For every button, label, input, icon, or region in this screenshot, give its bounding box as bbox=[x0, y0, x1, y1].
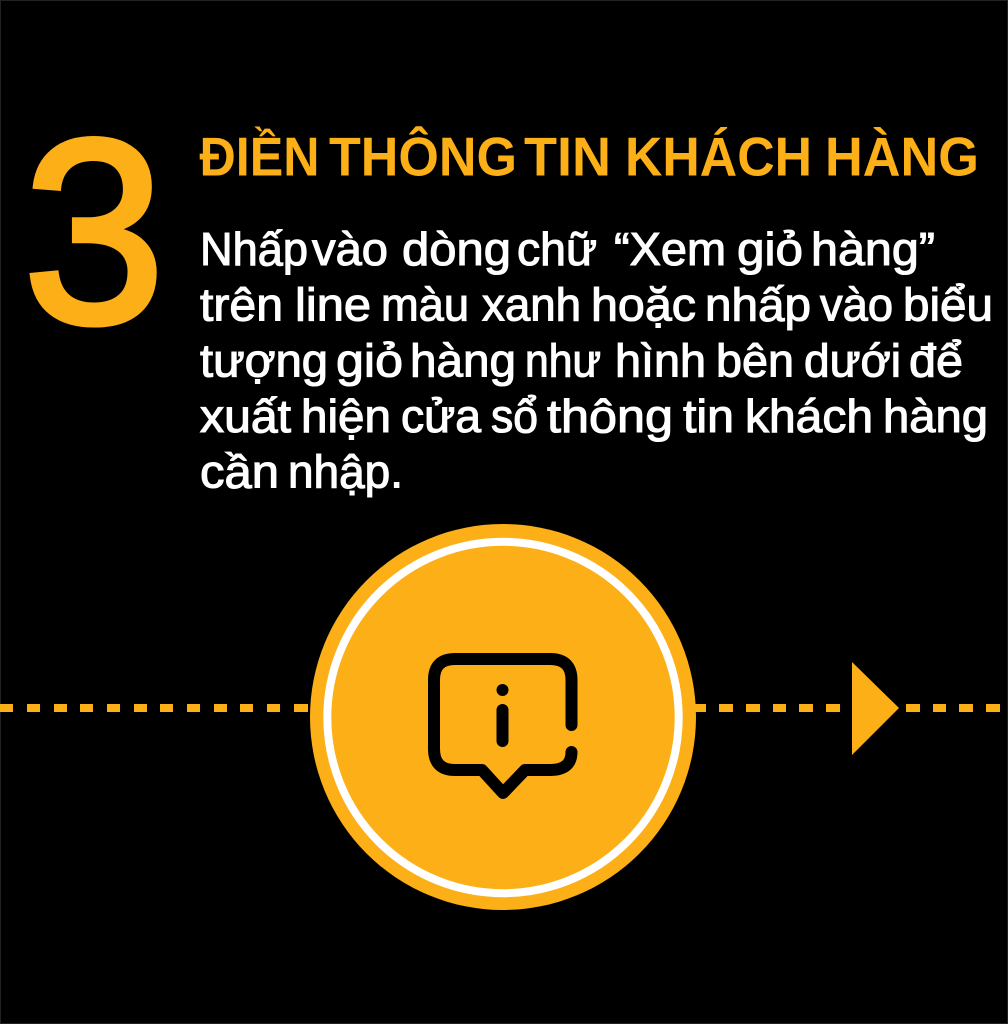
body text: giỏ bbox=[336, 334, 403, 386]
body text bbox=[200, 223, 993, 498]
heading bbox=[200, 126, 979, 188]
body text: màu bbox=[381, 279, 469, 331]
body text: biểu bbox=[903, 279, 993, 331]
step number 3: 3 bbox=[23, 85, 165, 378]
body text: để bbox=[909, 334, 963, 386]
body text: vào bbox=[820, 279, 893, 331]
arrow head bbox=[852, 662, 899, 755]
heading: TIN bbox=[524, 126, 611, 188]
heading: KHÁCH bbox=[625, 126, 812, 188]
body text: “Xem bbox=[614, 223, 726, 275]
body text: sổ bbox=[491, 390, 538, 442]
body text: tượng bbox=[200, 334, 328, 386]
icon: info speech bubble bbox=[434, 659, 572, 793]
body text: tin bbox=[683, 390, 734, 442]
dashed line right bbox=[694, 704, 1000, 712]
body text: hình bbox=[615, 334, 706, 386]
body text: nhập. bbox=[288, 446, 403, 498]
body text: nhấp bbox=[705, 279, 811, 331]
body text: trên bbox=[200, 279, 283, 331]
body text: xuất bbox=[200, 390, 291, 442]
circle badge bbox=[310, 524, 696, 910]
body text: dưới bbox=[804, 334, 901, 386]
body text: giỏ bbox=[737, 223, 803, 275]
body text: như bbox=[525, 334, 601, 386]
heading: THÔNG bbox=[329, 126, 517, 188]
body text: thông bbox=[547, 390, 673, 442]
body text: Nhấp bbox=[200, 223, 308, 275]
body text: khách bbox=[745, 390, 873, 442]
heading: HÀNG bbox=[825, 126, 979, 188]
body text: hoặc bbox=[591, 279, 696, 331]
body text: line bbox=[295, 279, 371, 331]
body text: hiện bbox=[301, 390, 391, 442]
heading: ĐIỀN bbox=[200, 126, 320, 188]
body text: bên bbox=[716, 334, 794, 386]
body text: chữ bbox=[517, 223, 597, 275]
body text: cửa bbox=[401, 390, 481, 442]
body text: vào bbox=[312, 223, 388, 275]
body text: hàng bbox=[410, 334, 516, 386]
body text: hàng bbox=[883, 390, 988, 442]
body text: xanh bbox=[482, 279, 581, 331]
dashed line left bbox=[0, 704, 308, 712]
body text: cần bbox=[200, 446, 279, 498]
body text: hàng” bbox=[811, 223, 935, 275]
body text: dòng bbox=[402, 223, 511, 275]
